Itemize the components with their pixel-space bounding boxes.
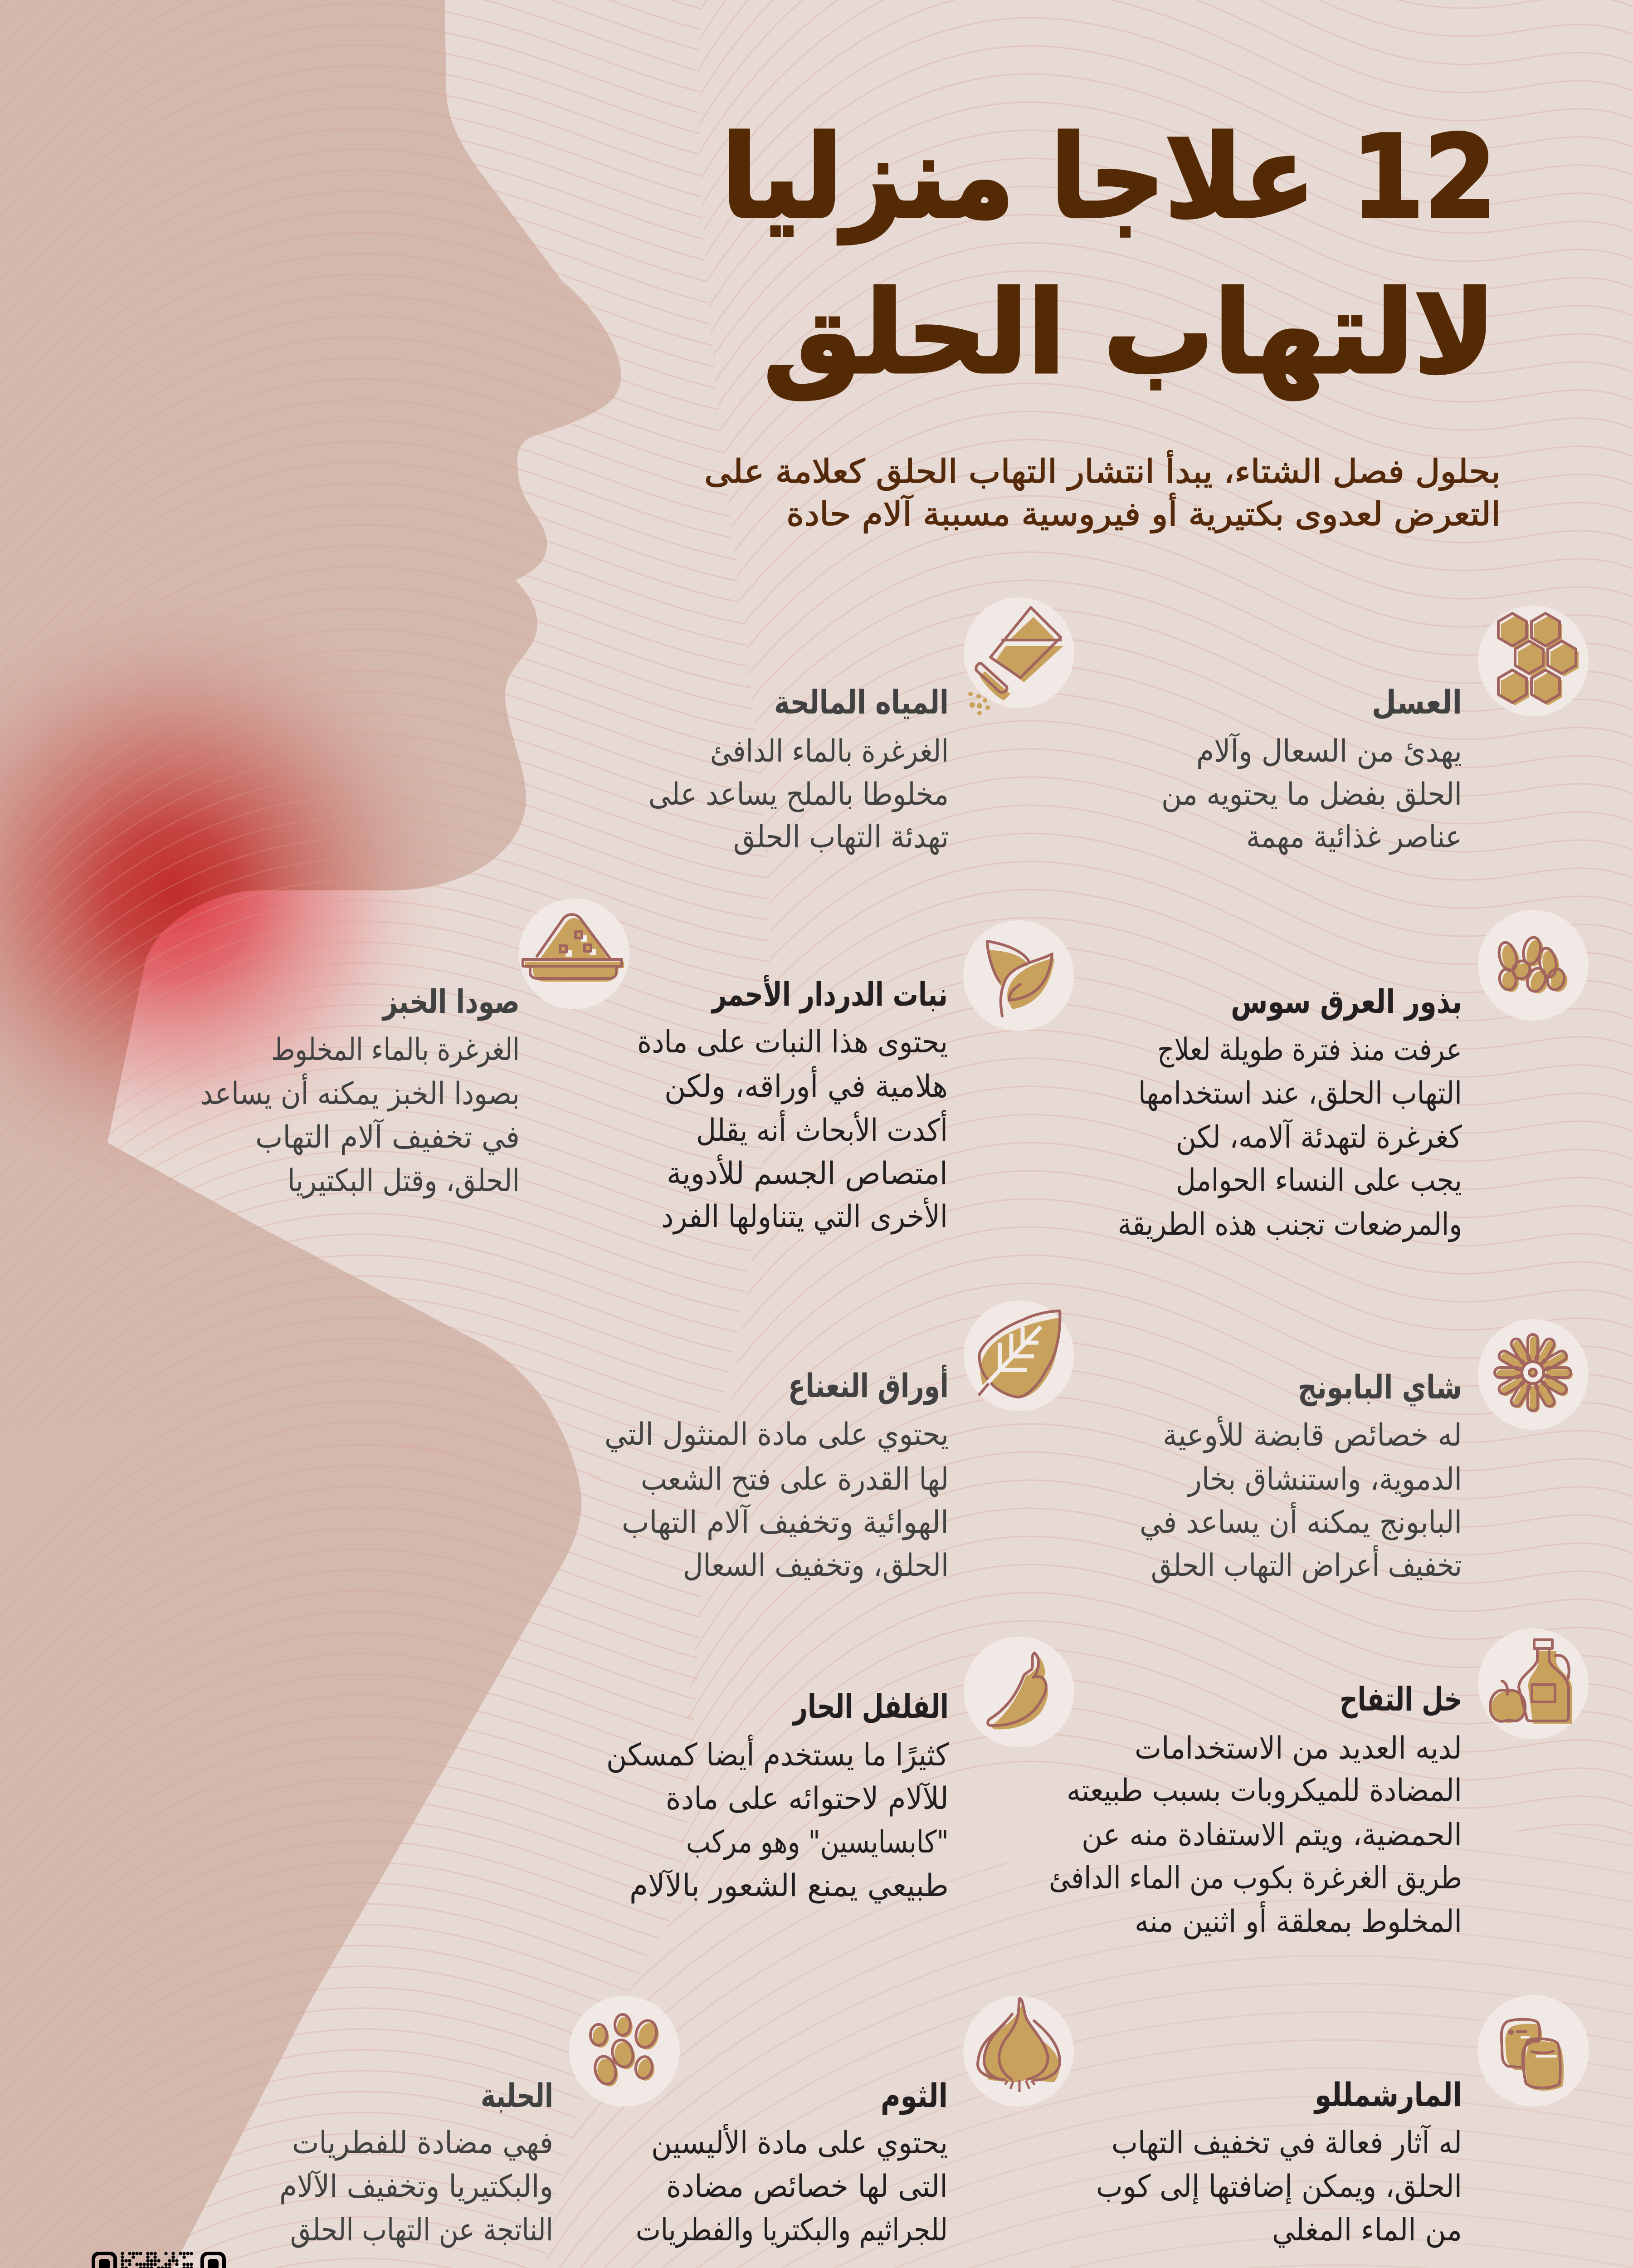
panel: garlic	[636, 1996, 1074, 2248]
icon: fenugreek seeds	[569, 1996, 680, 2107]
icon: baking soda bowl	[519, 899, 629, 1009]
panel: baking soda	[200, 899, 629, 1199]
text: mint leaves: الحلق، وتخفيف السعال	[683, 1548, 949, 1584]
text: hot pepper: "كابسايسين" وهو مركب	[686, 1824, 949, 1860]
text: marshmallow: المارشمللو	[1314, 2076, 1462, 2114]
text: slippery elm: امتصاص الجسم للأدوية	[667, 1154, 948, 1192]
text: mint leaves: لها القدرة على فتح الشعب	[641, 1461, 949, 1497]
text: apple cider vinegar	[1049, 1680, 1462, 1940]
text: garlic: للجراثيم والبكتريا والفطريات	[636, 2212, 948, 2248]
text: slippery elm: أكدت الأبحاث أنه يقلل	[696, 1110, 948, 1149]
panel: fenugreek	[279, 1996, 680, 2248]
text: baking soda: صودا الخبز	[382, 982, 520, 1021]
panel: mint leaves	[604, 1300, 1074, 1584]
text: garlic	[636, 2077, 948, 2248]
text: baking soda	[200, 982, 520, 1199]
text: mint leaves: يحتوي على مادة المنثول التي	[604, 1417, 949, 1452]
text: fenugreek: والبكتيريا وتخفيف الآلام	[279, 2169, 553, 2204]
text: apple cider vinegar: لديه العديد من الاستخدامات	[1135, 1730, 1462, 1766]
panel: hot pepper	[606, 1637, 1074, 1904]
icon: leaves	[963, 920, 1074, 1031]
text: hot pepper: طبيعي يمنع الشعور بالآلام	[629, 1868, 949, 1904]
text: fenugreek: الحلبة	[481, 2077, 553, 2115]
text: chamomile tea	[1140, 1368, 1462, 1584]
text: chamomile tea: شاي البابونج	[1298, 1368, 1462, 1407]
panel: salt water	[648, 597, 1074, 855]
text: fenugreek: الناتجة عن التهاب الحلق	[290, 2212, 553, 2248]
text: chamomile tea: البابونج يمكنه أن يساعد في	[1140, 1502, 1462, 1540]
text: chamomile tea: له خصائص قابضة للأوعية	[1163, 1416, 1462, 1453]
text: garlic: التى لها خصائص مضادة	[666, 2169, 948, 2204]
text: slippery elm: هلامية في أوراقه، ولكن	[664, 1066, 948, 1105]
QR code	[93, 2253, 224, 2268]
panel: slippery elm	[637, 920, 1074, 1235]
text: licorice seeds: والمرضعات تجنب هذه الطريقة	[1118, 1207, 1462, 1242]
text: honey: العسل	[1372, 683, 1462, 721]
title	[721, 111, 1497, 400]
text: apple cider vinegar: المضادة للميكروبات بسبب طبيعته	[1067, 1773, 1462, 1809]
panel: chamomile tea	[1140, 1319, 1589, 1584]
title: 12 علاجا منزليا	[721, 111, 1497, 244]
panel: marshmallow	[1096, 1995, 1589, 2248]
text: salt water: مخلوطا بالملح يساعد على	[648, 777, 949, 812]
text: slippery elm: يحتوى هذا النبات على مادة	[637, 1024, 948, 1060]
text: apple cider vinegar: المخلوط بمعلقة أو اثنين منه	[1135, 1901, 1462, 1940]
text: fenugreek	[279, 2077, 553, 2248]
text: chamomile tea: تخفيف أعراض التهاب الحلق	[1151, 1545, 1462, 1584]
text: licorice seeds: التهاب الحلق، عند استخدامها	[1138, 1075, 1462, 1111]
icon: licorice seeds	[1478, 910, 1589, 1021]
text: hot pepper: للآلام لاحتوائه على مادة	[666, 1781, 949, 1817]
text: honey: عناصر غذائية مهمة	[1246, 819, 1462, 855]
text: licorice seeds	[1118, 982, 1462, 1242]
text: garlic: يحتوي على مادة الأليسين	[651, 2124, 948, 2161]
text: licorice seeds: يجب على النساء الحوامل	[1176, 1163, 1462, 1198]
text: slippery elm: الأخرى التي يتناولها الفرد	[661, 1198, 948, 1235]
text: salt water: تهدئة التهاب الحلق	[733, 819, 949, 855]
panel: apple cider vinegar	[1049, 1628, 1589, 1940]
text: mint leaves: أوراق النعناع	[788, 1364, 949, 1405]
text: slippery elm	[637, 974, 948, 1235]
text: mint leaves	[604, 1364, 949, 1584]
text: hot pepper: الفلفل الحار	[792, 1687, 949, 1726]
text: baking soda: بصودا الخبز يمكنه أن يساعد	[200, 1073, 520, 1112]
text: marshmallow	[1096, 2076, 1462, 2248]
panel: honey	[1161, 606, 1589, 855]
icon: honeycomb	[1478, 606, 1589, 716]
text: slippery elm: نبات الدردار الأحمر	[711, 974, 948, 1014]
text: baking soda: الحلق، وقتل البكتيريا	[288, 1163, 520, 1199]
face and neck silhouette	[0, 0, 621, 2268]
text: licorice seeds: بذور العرق سوس	[1231, 982, 1462, 1021]
title: لالتهاب الحلق	[763, 267, 1496, 400]
throat glow: pale red in the neck gap	[0, 590, 499, 1225]
text: honey: الحلق بفضل ما يحتويه من	[1161, 777, 1462, 812]
intro text	[704, 450, 1501, 533]
text: salt water: الغرغرة بالماء الدافئ	[710, 733, 949, 769]
icon: chili pepper	[964, 1637, 1074, 1747]
text: apple cider vinegar: الحمضية، ويتم الاستفادة منه عن	[1082, 1817, 1462, 1853]
text: honey	[1161, 683, 1462, 855]
text: salt water	[648, 683, 949, 855]
text: salt water: المياه المالحة	[774, 683, 949, 721]
throat glow: deep red on the silhouette	[0, 638, 429, 1140]
intro text: بحلول فصل الشتاء، يبدأ انتشار التهاب الحلق كعلامة على	[704, 450, 1501, 491]
text: marshmallow: من الماء المغلي	[1272, 2212, 1462, 2248]
text: marshmallow: له آثار فعالة في تخفيف التهاب	[1111, 2124, 1462, 2161]
text: apple cider vinegar: خل التفاح	[1340, 1680, 1462, 1719]
text: hot pepper	[606, 1687, 949, 1904]
text: mint leaves: الهوائية وتخفيف آلام التهاب	[622, 1504, 949, 1540]
icon: mint leaf	[964, 1300, 1074, 1411]
text: garlic: الثوم	[881, 2077, 948, 2115]
text: chamomile tea: الدموية، واستنشاق بخار	[1187, 1461, 1462, 1497]
text: honey: يهدئ من السعال وآلام	[1196, 733, 1462, 769]
text: fenugreek: فهي مضادة للفطريات	[292, 2125, 553, 2161]
icon: marshmallows	[1477, 1995, 1589, 2107]
icon: vinegar bottle and apple	[1478, 1628, 1589, 1739]
text: baking soda: في تخفيف آلام التهاب	[255, 1119, 520, 1155]
text: licorice seeds: عرفت منذ فترة طويلة لعلاج	[1157, 1032, 1462, 1068]
icon: chamomile flower	[1478, 1319, 1589, 1430]
text: licorice seeds: كغرغرة لتهدئة آلامه، لكن	[1176, 1119, 1462, 1155]
intro text: التعرض لعدوى بكتيرية أو فيروسية مسببة آلام حادة	[786, 493, 1501, 533]
icon: salt shaker	[964, 597, 1074, 715]
text: baking soda: الغرغرة بالماء المخلوط	[271, 1032, 520, 1068]
text: hot pepper: كثيرًا ما يستخدم أيضا كمسكن	[606, 1735, 949, 1773]
text: apple cider vinegar: طريق الغرغرة بكوب من الماء الدافئ	[1049, 1860, 1462, 1896]
text: marshmallow: الحلق، ويمكن إضافتها إلى كوب	[1096, 2169, 1462, 2204]
icon: garlic bulb	[963, 1996, 1074, 2107]
panel: licorice seeds	[1118, 910, 1589, 1242]
